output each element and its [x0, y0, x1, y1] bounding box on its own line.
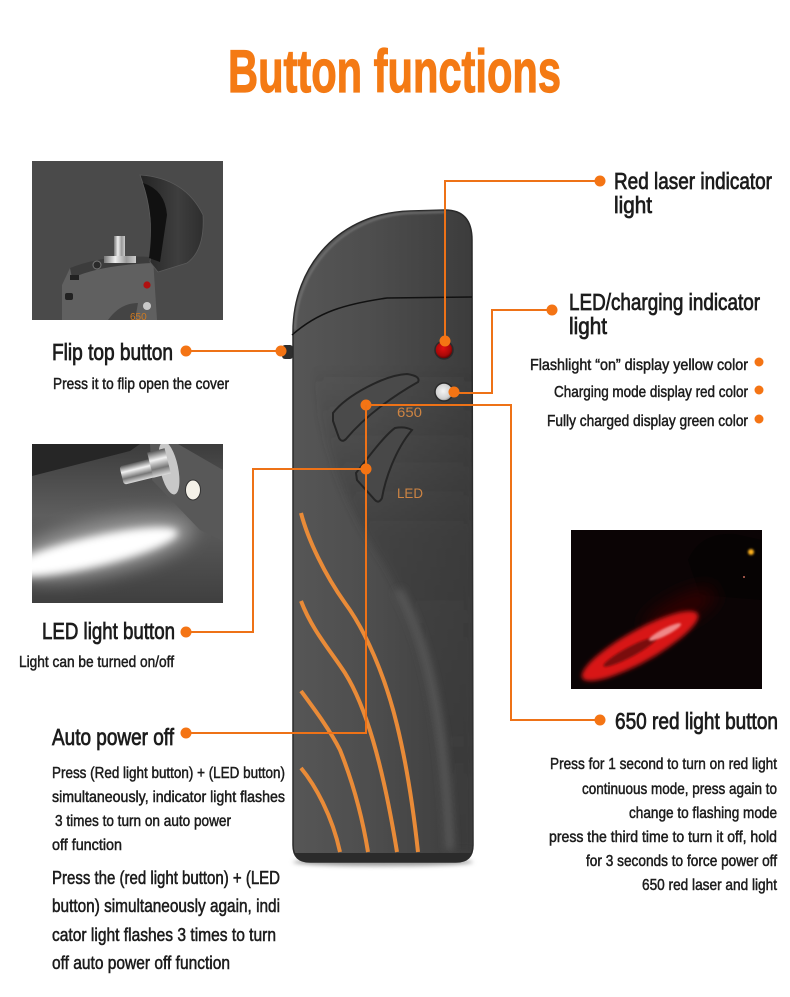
list: indicator colours: Flashlight “on” display yellow color: [530, 357, 749, 374]
text: auto power off on: Press (Red light button) + (LED button): [52, 765, 285, 782]
label: red laser indicator light: light: [614, 192, 653, 218]
label: LED charging indicator light: light: [569, 313, 608, 339]
heading: auto power off: Auto power off: [52, 724, 174, 750]
title: Button functions: [228, 38, 561, 105]
connector: LED charging indicator: [448, 304, 558, 398]
photo: red laser spot: [571, 530, 762, 692]
text: auto power off on: simultaneously, indicator light flashes: [52, 789, 285, 806]
label: flip top button: Press it to flip open the cover: [53, 376, 230, 393]
list: indicator colours: [530, 357, 764, 430]
connector: red laser indicator: [440, 176, 606, 346]
connector: flip top button: [180, 346, 286, 356]
text: auto power off on: off function: [52, 837, 122, 854]
photo: flip top open: 650: [130, 312, 147, 323]
device: fiber laser pen body: [282, 210, 474, 866]
connector: LED light button: [180, 464, 372, 638]
label: flip top button: Flip top button: [52, 339, 173, 365]
text: auto power off off: [52, 868, 280, 973]
text: auto power off on: [52, 765, 285, 854]
text: auto power off on: 3 times to turn on auto power: [55, 813, 232, 830]
orange wave stripes: [301, 513, 418, 852]
connector: auto power off: [180, 405, 366, 738]
label: red laser indicator light: [614, 168, 772, 218]
label: flip top button: [52, 339, 230, 393]
650 label: 650: [397, 405, 422, 420]
text: auto power off off: Press the (red light button) + (LED: [52, 868, 280, 888]
flip button nub: [282, 345, 293, 359]
device shadow: [293, 858, 473, 866]
red laser indicator: [435, 341, 453, 359]
label: LED light button: [19, 618, 175, 671]
list: indicator colours: Charging mode display red color: [554, 384, 749, 401]
cover seam: [292, 297, 472, 335]
photo: flip top open: [32, 161, 223, 323]
label: LED light button: Light can be turned on/off: [19, 654, 174, 671]
device shell: [293, 210, 473, 862]
photo: LED light: [32, 444, 223, 603]
white LED indicator: [435, 383, 453, 401]
text: auto power off off: cator light flashes 3 times to turn: [52, 925, 276, 945]
LED button recess: [356, 427, 412, 502]
text: auto power off off: button) simultaneously again, indi: [52, 896, 280, 916]
label: LED charging indicator light: [569, 289, 760, 339]
list: indicator colours: Fully charged display green color: [547, 413, 749, 430]
label: LED light button: LED light button: [42, 618, 175, 644]
text: 650 button description: [549, 756, 777, 894]
connector: 650 red light button: [360, 400, 606, 726]
650 button recess: [333, 374, 419, 441]
LED label: LED: [397, 486, 423, 501]
text: auto power off off: off auto power off function: [52, 953, 230, 973]
